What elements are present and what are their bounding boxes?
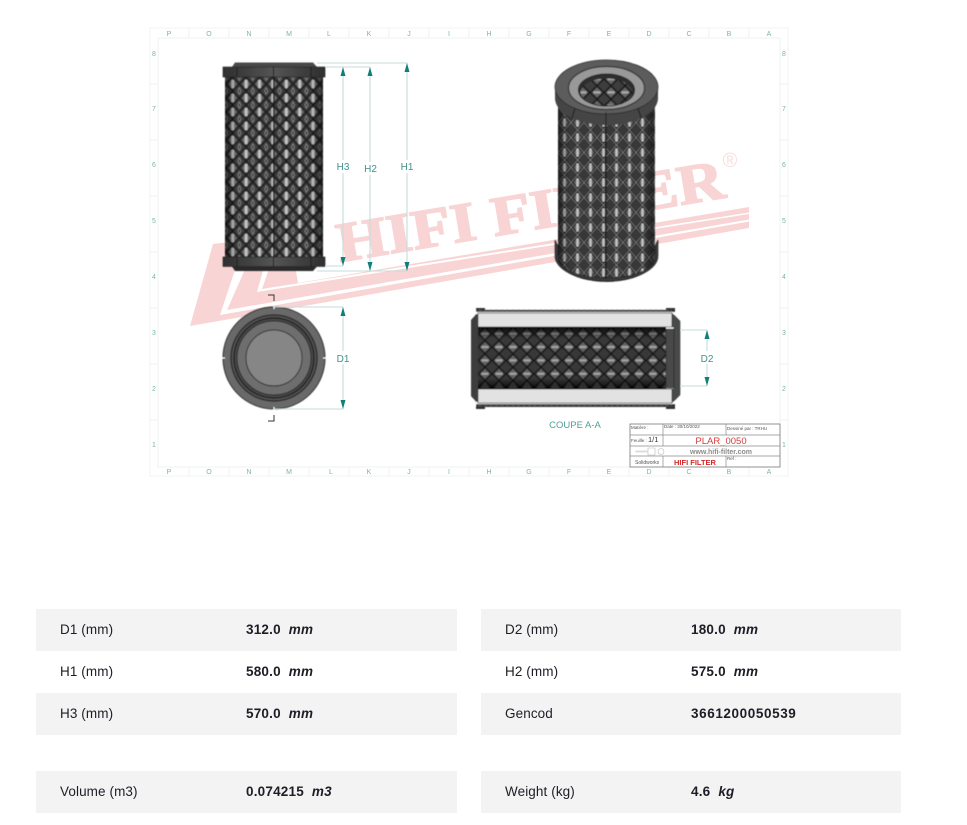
title block: Dessiné par : TRHU <box>727 426 767 431</box>
drawing frame with grid references: M <box>286 31 292 38</box>
inner mesh <box>478 327 666 389</box>
drawing frame with grid references: D <box>646 469 652 476</box>
drawing frame with grid references: 7 <box>782 106 786 113</box>
spec row: D1: 312.0 mm <box>246 622 313 637</box>
drawing frame with grid references: 2 <box>152 386 156 393</box>
drawing frame with grid references: B <box>727 469 732 476</box>
drawing frame with grid references: O <box>206 31 212 38</box>
drawing frame with grid references: P <box>167 31 172 38</box>
drawing frame with grid references: I <box>448 469 450 476</box>
drawing frame with grid references: H <box>486 469 492 476</box>
drawing frame with grid references: F <box>567 469 571 476</box>
drawing frame with grid references: C <box>686 469 692 476</box>
drawing frame with grid references <box>150 28 788 476</box>
top view of the filter <box>222 306 326 410</box>
title block: Date : 30/10/2022 <box>664 424 700 429</box>
drawing frame with grid references: M <box>286 469 292 476</box>
drawing frame with grid references: 5 <box>152 218 156 225</box>
spec row: H1 <box>60 664 313 679</box>
height dimensions H1 H2 H3: H3 <box>337 162 350 173</box>
drawing frame with grid references: N <box>246 31 252 38</box>
spec row: Volume: 0.074215 m3 <box>246 784 332 799</box>
left flange <box>471 314 478 402</box>
title block: Solidworks <box>635 460 660 466</box>
drawing frame with grid references: 7 <box>152 106 156 113</box>
drawing frame with grid references: 8 <box>782 51 786 58</box>
spec row: D1: D1 (mm) <box>60 622 113 637</box>
drawing frame with grid references: D <box>646 31 652 38</box>
section outer shell <box>473 308 675 409</box>
watermark: HIFI FILTER logo: HIFI FILTER <box>332 149 729 275</box>
drawing frame with grid references: 8 <box>152 51 156 58</box>
height dimensions H1 H2 H3 <box>317 63 415 271</box>
drawing frame with grid references: J <box>407 31 411 38</box>
drawing frame with grid references: J <box>407 469 411 476</box>
cross section A-A <box>471 308 680 409</box>
drawing frame with grid references: 3 <box>152 330 156 337</box>
drawing frame with grid references: K <box>367 469 372 476</box>
drawing frame with grid references: 5 <box>782 218 786 225</box>
section caption: COUPE A-A <box>549 420 602 431</box>
drawing frame with grid references: G <box>526 469 532 476</box>
drawing frame with grid references: 6 <box>782 162 786 169</box>
drawing frame with grid references: E <box>607 31 612 38</box>
spec row: D1 <box>36 609 457 651</box>
spec row: D2: 180.0 mm <box>691 622 758 637</box>
height dimensions H1 H2 H3: H2 <box>364 164 377 175</box>
filter media bands <box>478 313 672 403</box>
drawing frame with grid references: E <box>607 469 612 476</box>
spec row: Weight: 4.6 kg <box>691 784 734 799</box>
drawing frame with grid references: 4 <box>152 274 156 281</box>
title block: Ref : <box>727 456 737 461</box>
top cap with opening <box>555 60 658 125</box>
drawing frame with grid references: 3 <box>782 330 786 337</box>
drawing frame with grid references: G <box>526 31 532 38</box>
drawing frame with grid references: O <box>206 469 212 476</box>
mesh body <box>225 77 323 257</box>
title block: 1/1 <box>648 435 658 444</box>
bottom rim <box>555 240 658 281</box>
drawing frame with grid references: F <box>567 31 571 38</box>
watermark: HIFI FILTER logo: ® <box>723 150 738 172</box>
drawing frame with grid references: B <box>727 31 732 38</box>
spec row: H2 <box>505 664 758 679</box>
spec row: Gencod: 3661200050539 <box>691 706 796 721</box>
drawing frame with grid references: L <box>329 469 333 476</box>
drawing frame with grid references: L <box>327 31 331 38</box>
spec row: H3: H3 (mm) <box>60 706 113 721</box>
mesh cylinder <box>558 100 655 282</box>
spec row: Gencod <box>481 693 901 735</box>
diameter dimension D2 <box>680 330 715 386</box>
title block: Matière : <box>631 425 649 430</box>
spec row: H1: H1 (mm) <box>60 664 113 679</box>
title block: PLAR_0050 <box>695 436 747 447</box>
title block: HIFI FILTER <box>674 458 717 467</box>
isometric view of the filter <box>555 60 658 282</box>
drawing frame with grid references: P <box>167 469 172 476</box>
drawing frame with grid references: I <box>448 31 450 38</box>
height dimensions H1 H2 H3: H1 <box>401 162 414 173</box>
diameter dimension D1: D1 <box>337 354 350 365</box>
spec row: Volume: Volume (m3) <box>60 784 138 799</box>
spec row: H3: 570.0 mm <box>246 706 313 721</box>
spec row: H1: 580.0 mm <box>246 664 313 679</box>
drawing frame with grid references: N <box>246 469 252 476</box>
title block <box>630 424 780 467</box>
drawing frame with grid references: A <box>767 469 772 476</box>
drawing frame with grid references: 1 <box>152 442 156 449</box>
watermark: HIFI FILTER logo <box>190 149 749 326</box>
title block: www.hifi-filter.com <box>689 449 752 456</box>
front view of the filter <box>223 62 325 271</box>
spec row: H2: H2 (mm) <box>505 664 558 679</box>
spec row: Volume <box>36 771 457 813</box>
spec row: Weight: Weight (kg) <box>505 784 575 799</box>
section markers <box>268 295 274 421</box>
drawing frame with grid references: 1 <box>782 442 786 449</box>
spec row: Gencod: Gencod <box>505 706 553 721</box>
diameter dimension D2: D2 <box>701 354 714 365</box>
drawing frame with grid references: 6 <box>152 162 156 169</box>
title block: Feuille : <box>631 438 647 443</box>
spec row: H3 <box>36 693 457 735</box>
drawing frame with grid references: A <box>767 31 772 38</box>
drawing frame with grid references: H <box>486 31 492 38</box>
drawing frame with grid references: 2 <box>782 386 786 393</box>
bottom end cap <box>223 257 325 271</box>
right flange <box>666 313 680 403</box>
drawing frame with grid references: K <box>367 31 372 38</box>
drawing frame with grid references: 4 <box>782 274 786 281</box>
spec row: D2: D2 (mm) <box>505 622 558 637</box>
top end cap <box>223 62 325 77</box>
spec row: Weight <box>481 771 901 813</box>
spec row: D2 <box>481 609 901 651</box>
drawing frame with grid references: C <box>686 31 692 38</box>
spec row: H2: 575.0 mm <box>691 664 758 679</box>
diameter dimension D1 <box>274 307 351 409</box>
